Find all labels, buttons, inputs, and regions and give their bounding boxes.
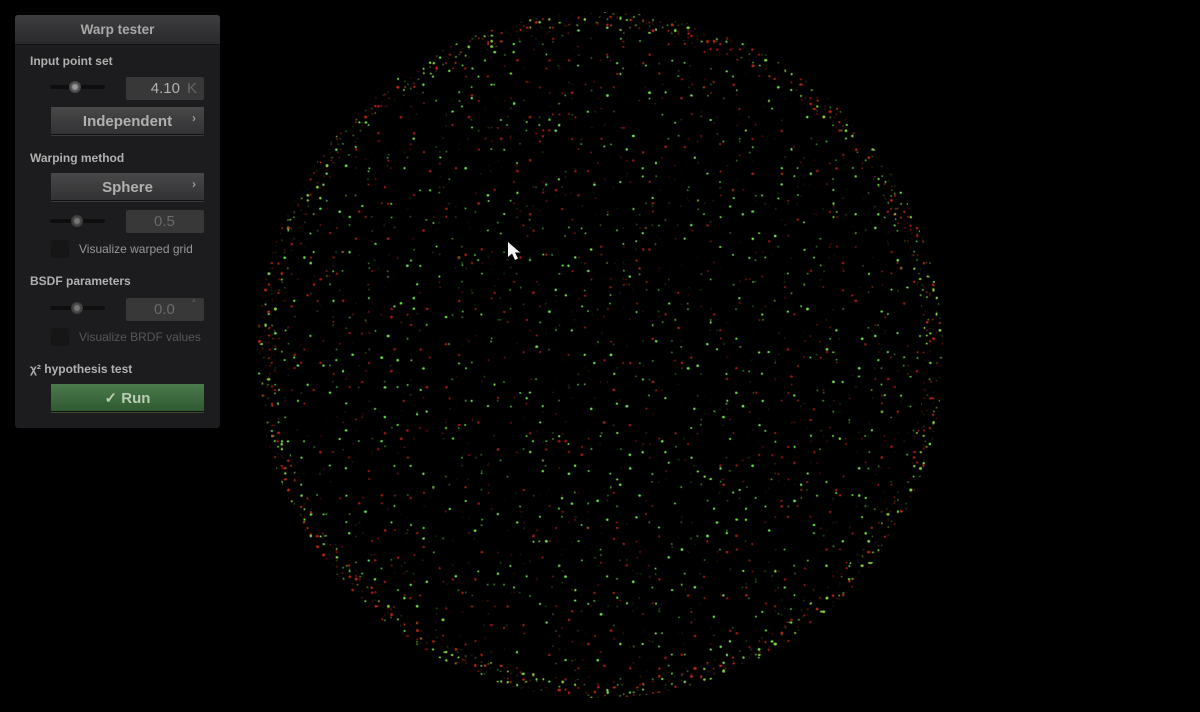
field: warp parameter: 0.5 <box>154 213 175 230</box>
label: visualize brdf values: Visualize BRDF values <box>79 330 201 344</box>
button: run: ✓ Run <box>105 390 150 407</box>
heading: warping method: Warping method <box>30 151 124 165</box>
field: bsdf parameter: ° <box>192 298 196 308</box>
panel: warp tester <box>15 15 220 428</box>
dropdown: independent: Independent <box>83 113 172 130</box>
label: visualize warped grid: Visualize warped grid <box>79 242 193 256</box>
heading: hypothesis test: χ² hypothesis test <box>30 362 132 376</box>
slider: point count <box>50 85 105 89</box>
checkbox: visualize brdf values <box>51 328 69 346</box>
icon: mouse cursor <box>508 242 520 260</box>
heading: bsdf parameters: BSDF parameters <box>30 274 131 288</box>
dropdown: sphere: › <box>192 177 196 191</box>
dropdown: sphere: Sphere <box>102 179 153 196</box>
field: point count <box>126 77 204 100</box>
panel title: Warp tester <box>81 22 154 37</box>
field: bsdf parameter <box>126 298 204 321</box>
point cloud: warped sphere samples <box>257 12 943 698</box>
dropdown: independent <box>51 107 204 135</box>
panel title <box>15 15 220 45</box>
field: bsdf parameter: 0.0 <box>154 301 175 318</box>
checkbox: visualize warped grid <box>51 240 69 258</box>
slider: bsdf parameter <box>50 306 105 310</box>
dropdown: sphere <box>51 173 204 201</box>
field: warp parameter <box>126 210 204 233</box>
button: run <box>51 384 204 412</box>
field: point count: K <box>187 80 197 97</box>
field: point count: 4.10 <box>151 80 180 97</box>
slider: warp parameter <box>50 219 105 223</box>
dropdown: independent: › <box>192 111 196 125</box>
heading: input point set: Input point set <box>30 54 113 68</box>
